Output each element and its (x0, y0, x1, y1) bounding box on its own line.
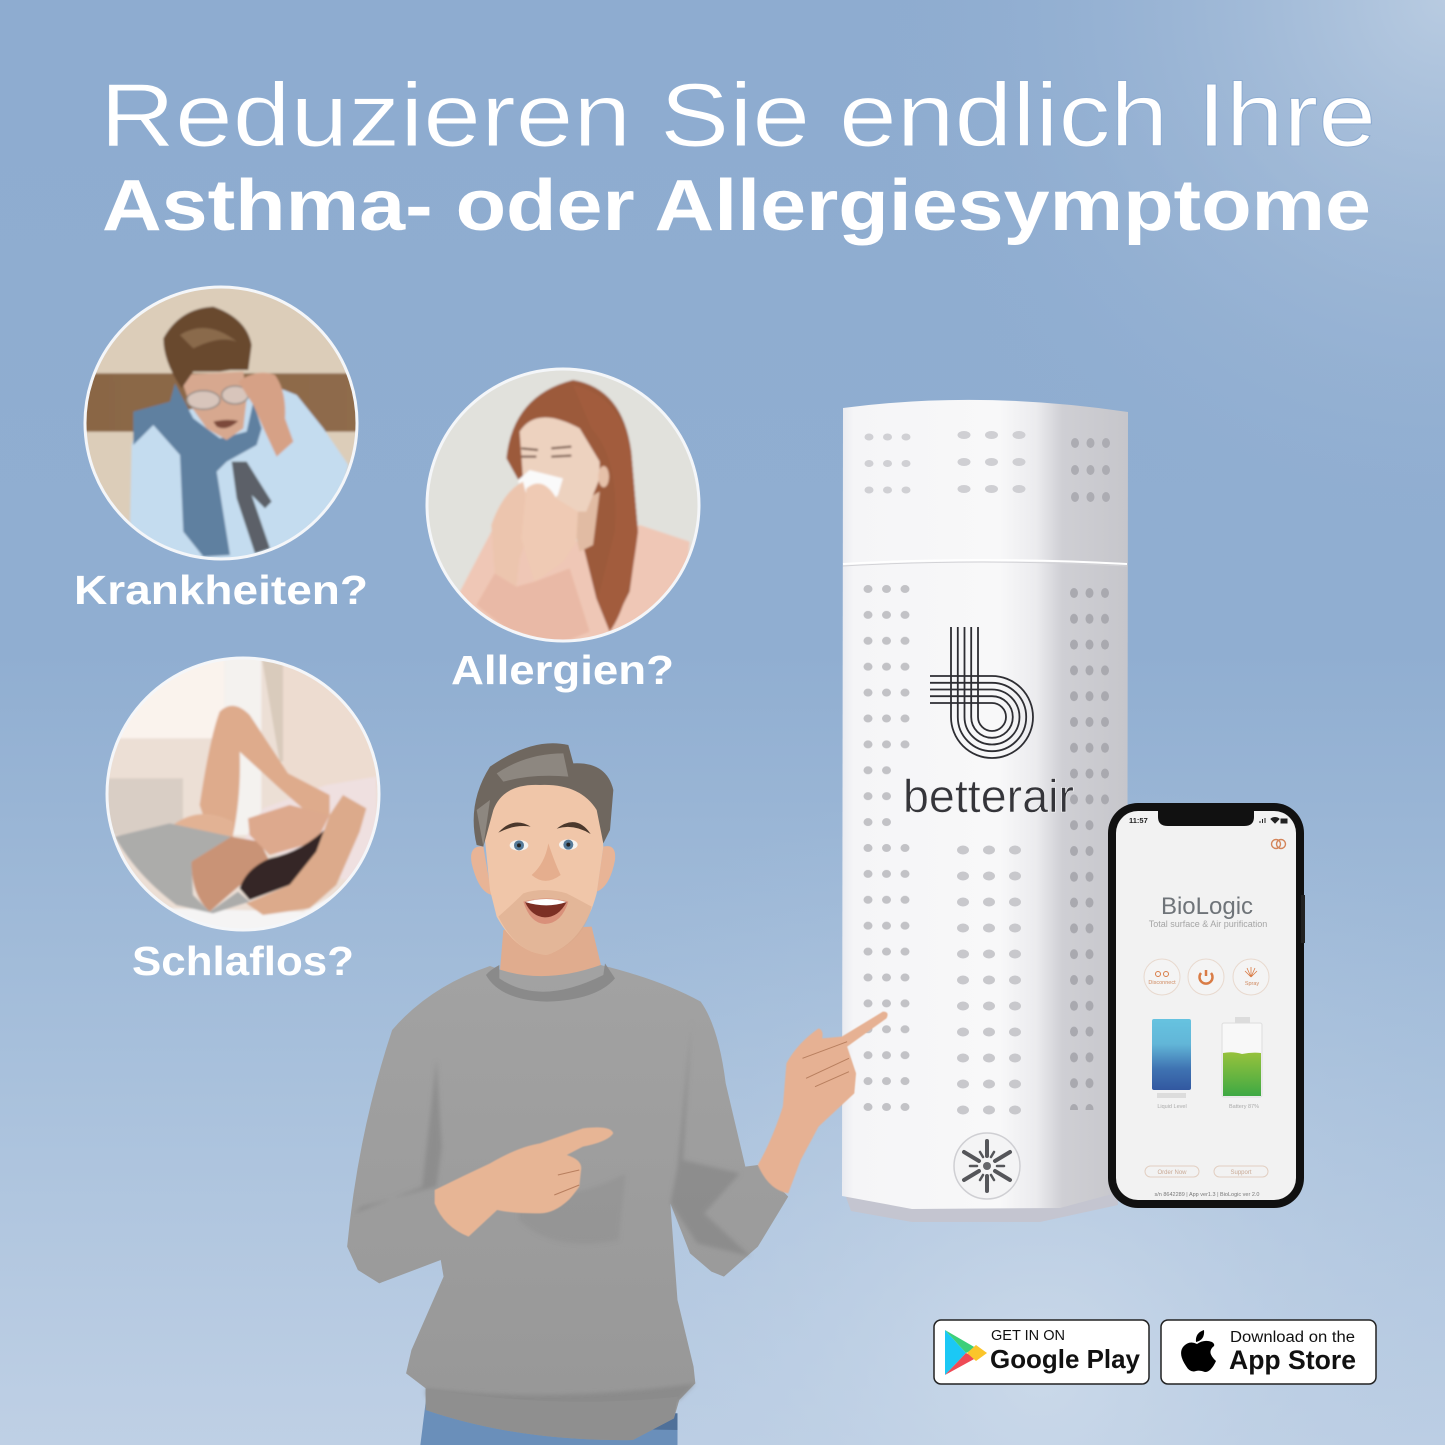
mouth (523, 898, 568, 924)
man pointing (347, 743, 888, 1445)
badge: App Store: App Store (1229, 1345, 1356, 1375)
title (100, 66, 1376, 246)
liquid level gauge (1152, 1019, 1191, 1110)
badge: Google Play (934, 1320, 1149, 1384)
eyebrows (498, 822, 591, 834)
app footer buttons: Support (1230, 1170, 1252, 1176)
app rings icon (1272, 840, 1286, 848)
phone (1108, 803, 1305, 1208)
head (471, 743, 615, 955)
app subtitle: Total surface & Air purification (1149, 919, 1267, 929)
photo: man with scarf holding temple (80, 285, 360, 565)
circle frame: man (85, 287, 357, 559)
battery gauge: Battery 87% (1229, 1104, 1259, 1110)
play icon (945, 1330, 987, 1375)
left hand pointing (435, 1127, 613, 1237)
photo: sleepless woman (103, 655, 383, 935)
betterair logo mark (930, 627, 1033, 758)
right forearm and hand (758, 1012, 888, 1193)
ears (471, 846, 615, 895)
badge: Google Play: Google Play (990, 1344, 1141, 1374)
title: Reduzieren Sie endlich Ihre (100, 66, 1376, 166)
badge: Google Play: GET IN ON (991, 1327, 1065, 1344)
label: Schlaflos: Schlaflos? (132, 938, 354, 984)
liquid level gauge: Liquid Level (1157, 1104, 1187, 1110)
app buttons: Spray (1245, 981, 1259, 987)
photo: woman sneezing (423, 365, 703, 645)
eyes (510, 839, 578, 851)
app footer buttons: Order Now (1157, 1170, 1187, 1176)
collar (486, 963, 615, 1002)
app buttons: Disconnect (1148, 980, 1176, 986)
neck (499, 927, 603, 992)
device shell (846, 1190, 1118, 1222)
betterair wordmark: betterair (903, 770, 1074, 822)
status bar: 11:57 (1129, 816, 1148, 825)
label: Krankheiten: Krankheiten? (74, 567, 368, 613)
badge: App Store (1161, 1320, 1376, 1384)
jeans (420, 1402, 677, 1445)
spray nozzle (954, 1133, 1020, 1199)
app version line: s/n 8642289 | App ver1.3 | BioLogic ver 2.0 (1155, 1192, 1259, 1198)
battery gauge (1222, 1017, 1262, 1110)
badge: App Store: Download on the (1230, 1329, 1355, 1346)
circle frame: sleepless woman (107, 658, 379, 930)
circle frame: woman (427, 369, 699, 641)
device perforations (859, 425, 1114, 1127)
title: Asthma- oder Allergiesymptome (102, 166, 1371, 246)
sweater (347, 965, 788, 1440)
label: Allergien: Allergien? (451, 647, 674, 693)
hair (474, 743, 613, 847)
apple icon (1181, 1330, 1216, 1372)
app buttons (1144, 959, 1269, 995)
sweater shading (354, 1020, 751, 1409)
app title: BioLogic (1161, 893, 1253, 920)
phone notch (1158, 811, 1254, 826)
nose (532, 843, 561, 881)
app footer buttons (1145, 1166, 1268, 1177)
device (842, 400, 1128, 1222)
